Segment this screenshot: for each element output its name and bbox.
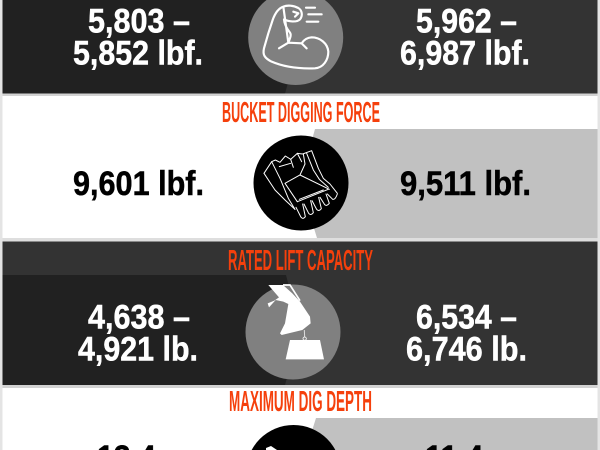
icon: flexed arm <box>248 0 343 85</box>
panel: maximum dig depth <box>2 385 598 450</box>
right value: 6,746 lb. <box>406 330 527 368</box>
panel: top comparison <box>2 0 598 94</box>
panel: bucket digging force: BUCKET DIGGING FORCE <box>222 97 380 129</box>
right value <box>406 298 527 368</box>
left value <box>78 298 198 368</box>
left value: 4,921 lb. <box>78 330 198 368</box>
right value <box>400 2 530 72</box>
left value: 9,601 lbf. <box>73 165 204 203</box>
right value: 6,534 – <box>416 298 517 336</box>
left value: 5,852 lbf. <box>73 34 203 72</box>
left value: 4,638 – <box>88 298 190 336</box>
panel: rated lift capacity: RATED LIFT CAPACITY <box>228 245 373 277</box>
icon: dig depth <box>246 425 341 450</box>
right value: 6,987 lbf. <box>400 34 530 72</box>
panel: rated lift capacity <box>2 238 598 385</box>
panel: bucket digging force <box>2 94 598 238</box>
right value: 9,511 lbf. <box>400 165 531 203</box>
icon: bucket <box>254 136 348 230</box>
left value: 5,803 – <box>88 2 190 40</box>
icon: bucket lifting weight <box>246 284 340 380</box>
panel: maximum dig depth: MAXIMUM DIG DEPTH <box>229 386 372 418</box>
right value: 5,962 – <box>416 2 517 40</box>
left value <box>73 2 203 72</box>
